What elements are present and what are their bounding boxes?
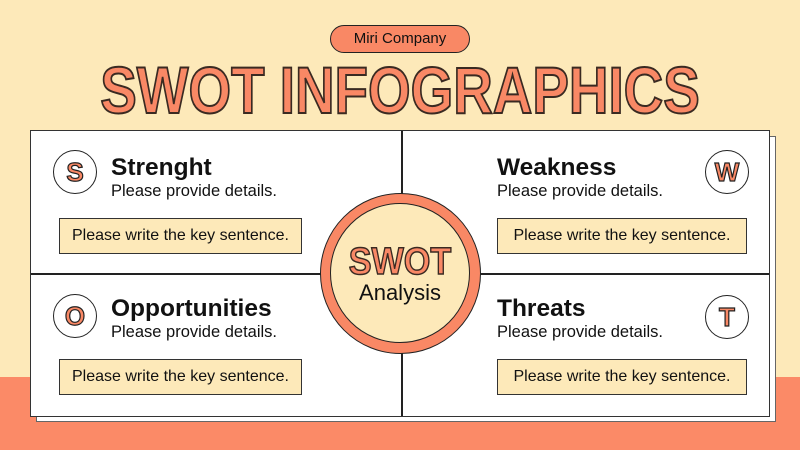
- card shadow: [36, 136, 776, 422]
- key sentence: [497, 218, 747, 254]
- panel: opportunities: [53, 294, 302, 395]
- panel: strength: [53, 150, 302, 254]
- key sentence: Please write the key sentence.: [513, 227, 730, 244]
- text: Please provide details.: [497, 323, 663, 341]
- center circle: [320, 193, 481, 354]
- text: Please provide details.: [497, 182, 663, 200]
- bottom band: [0, 377, 800, 450]
- text: Please provide details.: [111, 323, 277, 341]
- icon: S: [53, 150, 97, 194]
- icon: O: [53, 294, 97, 338]
- heading: Opportunities: [111, 295, 272, 322]
- icon: W: [705, 150, 749, 194]
- heading: Strenght: [111, 154, 212, 181]
- title: SWOT INFOGRAPHICS: [100, 53, 700, 127]
- pill: company: [330, 25, 470, 53]
- center circle: Analysis: [359, 280, 441, 305]
- key sentence: [59, 218, 302, 254]
- key sentence: Please write the key sentence.: [72, 227, 289, 244]
- text: Please provide details.: [111, 182, 277, 200]
- panel: threats: [497, 295, 749, 395]
- key sentence: [59, 359, 302, 395]
- pill: company: Miri Company: [354, 30, 446, 47]
- key sentence: Please write the key sentence.: [513, 368, 730, 385]
- icon: S: S: [66, 157, 84, 187]
- key sentence: Please write the key sentence.: [72, 368, 289, 385]
- panel: main card: [30, 130, 770, 417]
- icon: W: W: [715, 157, 739, 187]
- icon: T: T: [719, 302, 735, 332]
- key sentence: [497, 359, 747, 395]
- center circle: SWOT: [349, 241, 451, 283]
- icon: O: O: [65, 301, 85, 331]
- icon: T: [705, 295, 749, 339]
- panel: weakness: [497, 150, 749, 254]
- heading: Weakness: [497, 154, 616, 181]
- heading: Threats: [497, 295, 586, 322]
